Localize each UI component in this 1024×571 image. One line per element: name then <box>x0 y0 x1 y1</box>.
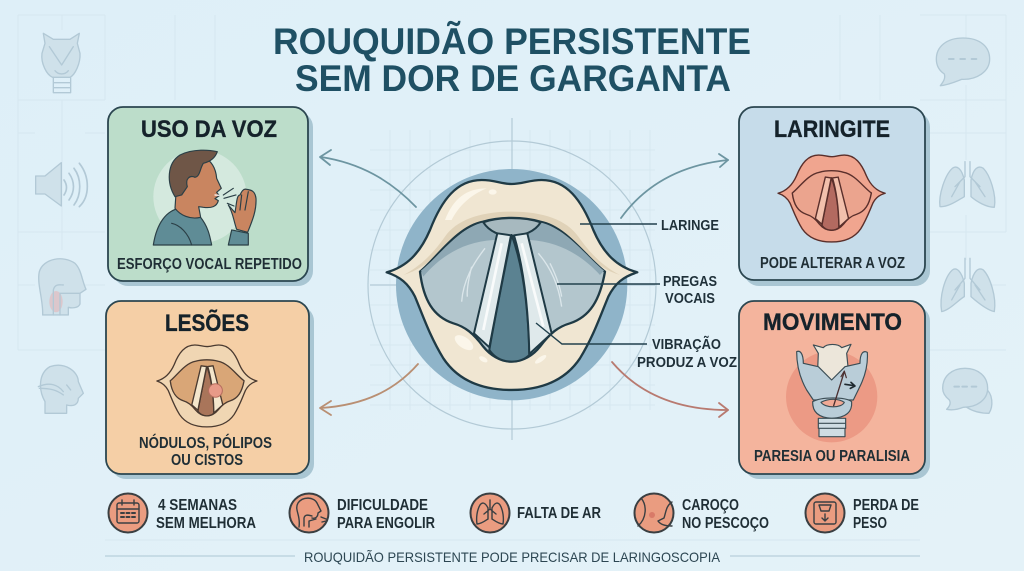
panel: lesoes <box>106 301 314 479</box>
icon: larynx cartilage with paresis arrow <box>786 344 877 442</box>
symptom: dificuldade para engolir: DIFICULDADE <box>337 497 428 514</box>
background icon: double speech bubble <box>943 368 992 413</box>
icon: scale <box>806 494 844 532</box>
caption: nodulos, polipos ou cistos: OU CISTOS <box>171 452 243 469</box>
icon: calendar <box>108 494 148 532</box>
background icon: head profile <box>38 365 83 413</box>
icon: neck lump <box>634 494 674 532</box>
caption: paresia ou paralisia: PARESIA OU PARALISIA <box>754 448 910 465</box>
arrow: to laringite <box>621 154 728 218</box>
symptom: caroco no pescoco: CAROÇO <box>682 497 739 514</box>
background icon: head with throat <box>39 259 86 315</box>
symptom: 4 semanas sem melhora <box>108 494 256 532</box>
arrow: to lesoes <box>320 364 418 415</box>
symptom: falta de ar: FALTA DE AR <box>517 505 601 522</box>
label: pregas vocais: VOCAIS <box>665 291 715 307</box>
icon: lungs <box>470 494 510 532</box>
target circle behind larynx <box>368 118 656 440</box>
heading: lesoes: LESÕES <box>165 309 249 337</box>
heading: laringite: LARINGITE <box>774 116 890 143</box>
background icon: larynx <box>42 33 80 93</box>
background icon: speech bubble <box>936 38 990 86</box>
icon: throat swallowing <box>290 494 328 532</box>
symptom: 4 semanas sem melhora: 4 SEMANAS <box>158 497 237 514</box>
title: SEM DOR DE GARGANTA <box>295 58 731 99</box>
label: vibracao produz a voz <box>637 335 737 371</box>
label: pregas vocais <box>663 274 717 307</box>
panel: laringite <box>739 107 930 286</box>
background icon: lungs upper <box>940 162 995 207</box>
footer text: ROUQUIDÃO PERSISTENTE PODE PRECISAR DE LARINGOSCOPIA <box>304 549 721 565</box>
background icon: speaker <box>36 163 87 207</box>
callout lines <box>536 224 660 344</box>
footer line left <box>105 555 295 557</box>
heading: movimento: MOVIMENTO <box>763 309 902 336</box>
symptom: perda de peso <box>806 494 919 532</box>
heading: uso da voz: USO DA VOZ <box>141 116 277 143</box>
caption: nodulos, polipos ou cistos: NÓDULOS, PÓLIPOS <box>139 434 272 452</box>
symptom: caroco no pescoco: NO PESCOÇO <box>682 515 769 532</box>
arrow: to movimento <box>612 362 728 417</box>
footer line right <box>730 555 920 557</box>
label: vibracao produz a voz: PRODUZ A VOZ <box>637 355 737 371</box>
caption: pode alterar a voz: PODE ALTERAR A VOZ <box>760 255 905 272</box>
arrow: to uso da voz <box>320 150 416 207</box>
background icon: lungs lower <box>941 258 995 312</box>
caption: nodulos, polipos ou cistos <box>139 434 272 469</box>
label: vibracao produz a voz: VIBRAÇÃO <box>652 335 721 353</box>
symptom: perda de peso: PERDA DE <box>853 497 919 514</box>
central larynx illustration <box>387 169 637 400</box>
symptom: dificuldade para engolir: PARA ENGOLIR <box>337 515 435 532</box>
icon: person straining voice <box>153 150 256 245</box>
panel: uso da voz <box>108 107 313 286</box>
caption: esforco vocal repetido: ESFORÇO VOCAL REPETIDO <box>117 256 302 273</box>
symptom: 4 semanas sem melhora: SEM MELHORA <box>156 515 256 532</box>
symptom: caroco no pescoco <box>634 494 769 532</box>
symptom: falta de ar <box>470 494 601 532</box>
title <box>273 20 751 99</box>
symptom: dificuldade para engolir <box>290 494 435 532</box>
icon: larynx with lesion <box>157 345 257 427</box>
icon: inflamed larynx <box>778 155 885 242</box>
label: laringe: LARINGE <box>661 218 719 234</box>
label: pregas vocais: PREGAS <box>663 274 717 290</box>
title: ROUQUIDÃO PERSISTENTE <box>273 20 751 62</box>
symptom: perda de peso: PESO <box>853 515 887 532</box>
panel: movimento <box>739 301 930 479</box>
